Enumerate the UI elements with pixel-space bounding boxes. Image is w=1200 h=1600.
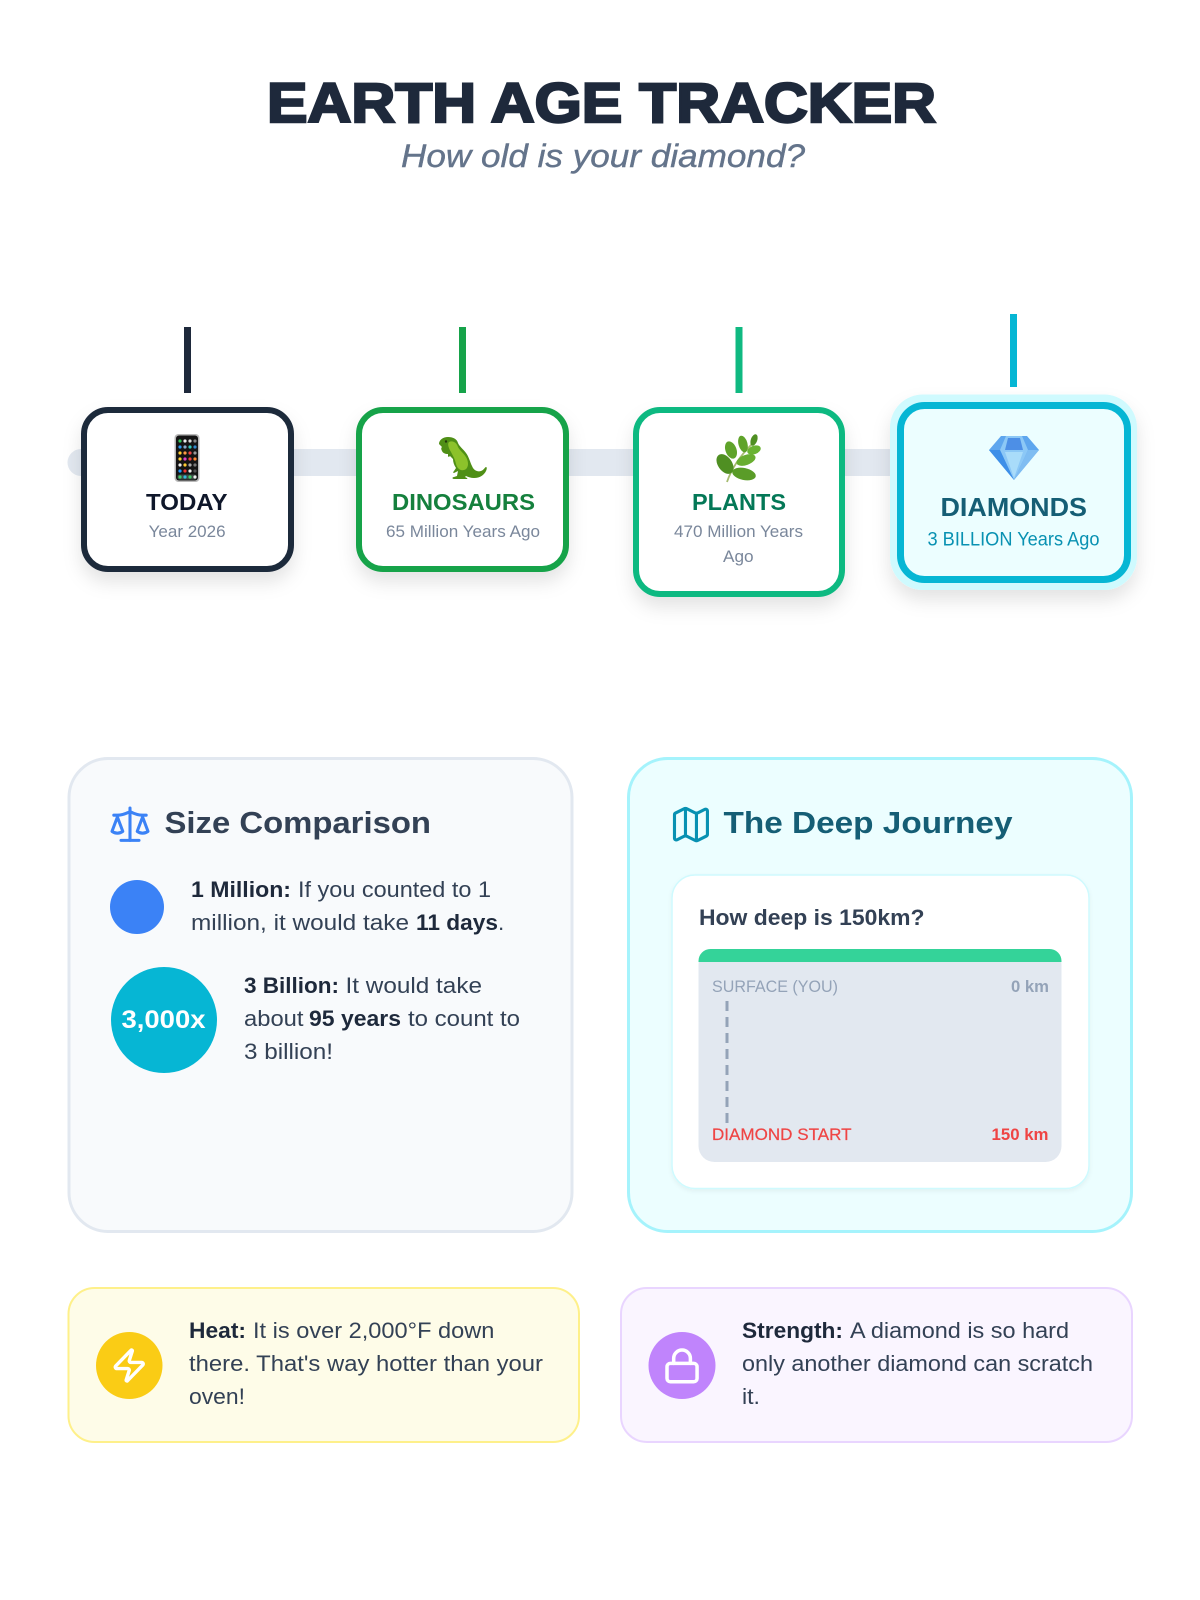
circle: 3 billion: 3,000x	[122, 1006, 206, 1034]
marker: diamonds	[1010, 314, 1017, 387]
text: 3 billion: about	[244, 1006, 304, 1031]
depth line	[726, 1001, 728, 1124]
marker: dinosaurs	[459, 327, 466, 393]
card: today	[84, 410, 291, 569]
text: heat: there. That's way hotter than your	[189, 1351, 544, 1376]
label: today: TODAY	[146, 489, 228, 515]
date: plants: Ago	[723, 548, 754, 566]
text: heat: oven!	[189, 1384, 245, 1409]
date: today: Year 2026	[149, 523, 226, 541]
depth question: How deep is 150km?	[699, 905, 924, 930]
card: dinosaurs	[359, 410, 566, 569]
text: heat: It is over 2,000°F down	[253, 1318, 494, 1343]
title: EARTH AGE TRACKER	[267, 71, 936, 134]
timeline track	[68, 449, 1108, 476]
surface label: SURFACE (YOU)	[712, 978, 838, 996]
callout: strength	[621, 1288, 1132, 1442]
text: 1 million: million, it would take	[191, 910, 409, 935]
date: plants	[674, 523, 803, 566]
callout: heat	[68, 1288, 579, 1442]
panel: size comparison	[69, 758, 572, 1232]
icon: lock	[648, 1332, 716, 1399]
icon: t-rex	[439, 437, 487, 479]
subtitle: How old is your diamond?	[401, 138, 805, 174]
label: diamonds: DIAMONDS	[940, 492, 1087, 522]
label: dinosaurs: DINOSAURS	[392, 489, 535, 515]
icon: gem	[989, 436, 1039, 480]
text: 3 billion: to count to	[408, 1006, 520, 1031]
text: 1 million: 1 Million:	[191, 877, 291, 902]
card: diamonds	[890, 394, 1137, 590]
header	[267, 71, 936, 174]
text: strength: it.	[742, 1384, 760, 1409]
text: heat	[189, 1318, 544, 1409]
marker: today	[184, 327, 191, 393]
date: dinosaurs: 65 Million Years Ago	[386, 523, 540, 541]
text: 1 million: If you counted to 1	[298, 877, 491, 902]
text: 3 billion: 3 billion!	[244, 1039, 333, 1064]
text: 1 million: 11 days	[416, 910, 498, 935]
card: plants	[636, 410, 842, 594]
heading: The Deep Journey	[724, 805, 1013, 840]
depth chart	[698, 949, 1062, 1162]
text: 1 million	[191, 877, 504, 935]
text: strength: A diamond is so hard	[850, 1318, 1069, 1343]
circle: 1 million	[110, 880, 164, 934]
text: 1 million: .	[498, 910, 504, 935]
date: diamonds: 3 BILLION Years Ago	[928, 528, 1100, 550]
text: strength	[742, 1318, 1093, 1409]
icon: herb	[713, 433, 762, 482]
text: 3 billion: It would take	[346, 973, 482, 998]
icon: map	[674, 809, 707, 841]
card: depth	[672, 875, 1089, 1188]
text: 3 billion: 95 years	[309, 1006, 401, 1031]
text: 3 billion: 3 Billion:	[244, 973, 339, 998]
text: 3 billion	[244, 973, 520, 1064]
text: strength: Strength:	[742, 1318, 843, 1343]
text: heat: Heat:	[189, 1318, 246, 1343]
text: strength: only another diamond can scratch	[742, 1351, 1093, 1376]
panel: the deep journey	[628, 758, 1132, 1232]
diamond start label: DIAMOND START	[712, 1126, 852, 1144]
circle: 3 billion	[111, 967, 217, 1073]
label: plants: PLANTS	[692, 489, 786, 515]
surface depth: 0 km	[1011, 978, 1049, 996]
diamond depth: 150 km	[992, 1126, 1048, 1144]
date: plants: 470 Million Years	[674, 523, 803, 541]
heading: Size Comparison	[164, 805, 431, 840]
icon: phone	[174, 434, 200, 482]
icon: scale	[112, 808, 148, 840]
marker: plants	[736, 327, 742, 393]
icon: lightning	[96, 1332, 162, 1399]
timeline	[68, 314, 1137, 594]
